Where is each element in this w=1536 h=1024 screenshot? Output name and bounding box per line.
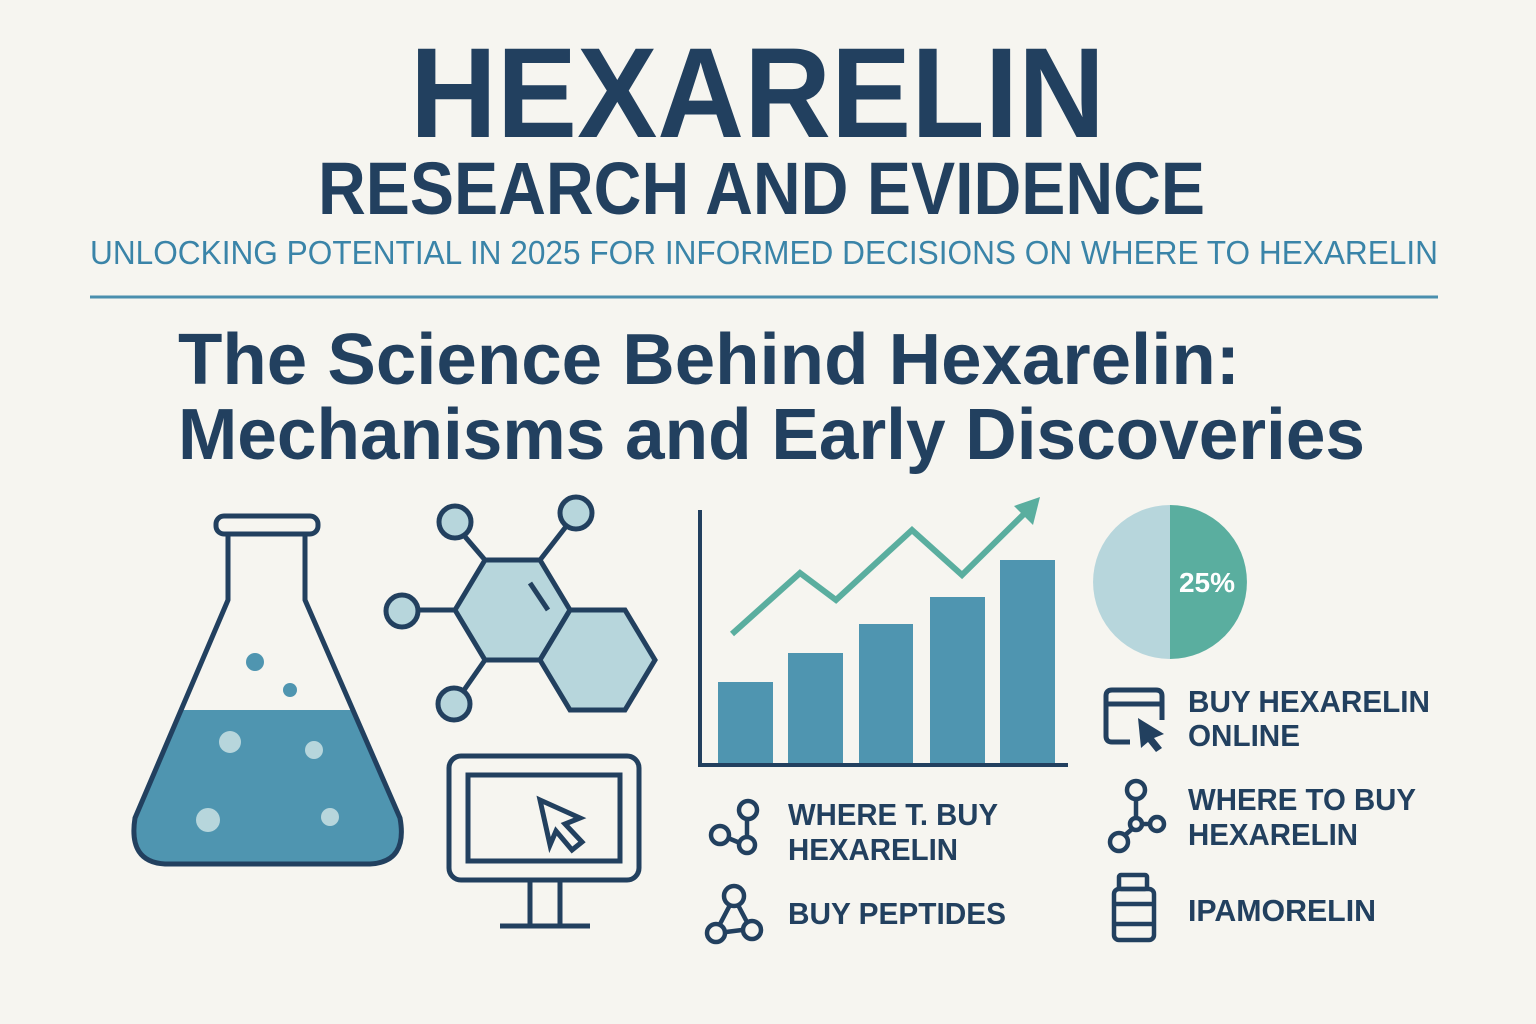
list item: where to buy hexarelin (right): HEXARELIN: [1188, 817, 1358, 852]
icon: monitor: [449, 756, 639, 926]
pie chart: 25%: [1179, 567, 1235, 598]
list item: buy hexarelin online: ONLINE: [1188, 718, 1300, 753]
list item: buy hexarelin online: [1106, 684, 1430, 753]
pie chart: [1093, 505, 1247, 659]
list item: where to buy hexarelin (left): WHERE T. BUY: [788, 797, 998, 832]
bar chart: [700, 497, 1068, 765]
list item: where to buy hexarelin (right): WHERE TO BUY: [1188, 782, 1416, 817]
list item: where to buy hexarelin (left): [711, 797, 998, 867]
icon: flask: [134, 516, 401, 864]
icon: molecule: [386, 497, 655, 720]
section heading: The Science Behind Hexarelin:: [178, 320, 1240, 400]
list item: buy peptides: [707, 886, 1006, 942]
section heading: [178, 320, 1365, 475]
list item: buy peptides: BUY PEPTIDES: [788, 896, 1006, 931]
section heading: Mechanisms and Early Discoveries: [178, 395, 1365, 475]
list item: where to buy hexarelin (right): [1110, 781, 1416, 852]
list item: where to buy hexarelin (left): HEXARELIN: [788, 832, 958, 867]
list item: ipamorelin: [1114, 875, 1376, 940]
list item: buy hexarelin online: BUY HEXARELIN: [1188, 684, 1430, 719]
subtitle: RESEARCH AND EVIDENCE: [318, 147, 1205, 230]
list item: ipamorelin: IPAMORELIN: [1188, 893, 1376, 928]
tagline: UNLOCKING POTENTIAL IN 2025 FOR INFORMED DECISIONS ON WHERE TO HEXARELIN: [90, 234, 1438, 271]
title: HEXARELIN: [410, 22, 1105, 165]
